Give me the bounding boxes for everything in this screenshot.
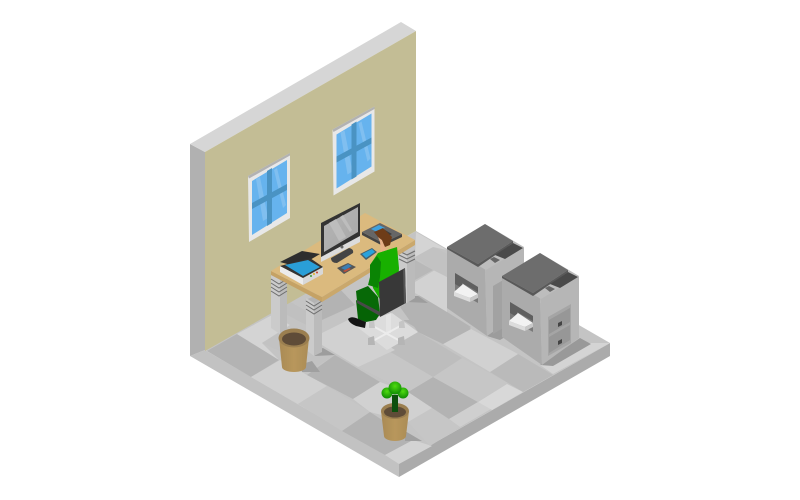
waste bin: [278, 328, 320, 372]
torso: [370, 247, 399, 303]
chair base: [368, 313, 405, 345]
thigh: [356, 286, 380, 313]
book: [362, 223, 402, 246]
floor slab: [190, 231, 610, 477]
tablet: [360, 248, 377, 260]
printer front with drawers: [502, 253, 579, 365]
desk: [271, 213, 415, 302]
floor tiles: [207, 232, 610, 464]
wall: [190, 22, 416, 356]
window left: [248, 153, 290, 242]
shoes: [348, 317, 366, 328]
monitor: [321, 203, 360, 263]
printer back: [447, 224, 524, 336]
hair: [374, 228, 392, 247]
arm: [368, 256, 381, 288]
calculator: [337, 263, 356, 274]
scanner: [280, 251, 323, 285]
lower legs: [356, 300, 380, 322]
desk legs: [271, 249, 428, 356]
potted plant: [381, 382, 422, 441]
printer shadows: [487, 309, 591, 366]
neck: [378, 237, 387, 252]
person: [348, 228, 399, 328]
window right: [332, 106, 374, 196]
office chair: [357, 268, 406, 317]
